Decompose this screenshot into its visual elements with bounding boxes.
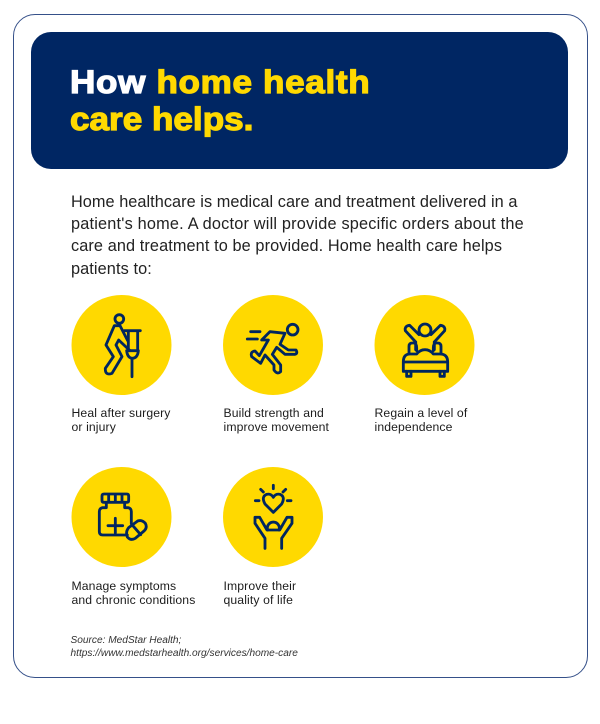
item: quality of life bbox=[223, 467, 323, 607]
intro paragraph bbox=[71, 193, 524, 278]
label bbox=[374, 406, 468, 434]
title: How home health bbox=[70, 64, 370, 100]
source note bbox=[70, 635, 298, 659]
title banner bbox=[31, 32, 568, 169]
label: or injury bbox=[72, 420, 116, 434]
label: quality of life bbox=[224, 593, 293, 607]
title bbox=[70, 64, 370, 138]
yellow circle with heart and raised arms icon bbox=[223, 467, 323, 567]
intro paragraph: patient's home. A doctor will provide specific orders about the bbox=[71, 215, 524, 233]
label bbox=[224, 406, 329, 434]
source note: https://www.medstarhealth.org/services/home-care bbox=[70, 648, 298, 659]
title: care helps. bbox=[70, 101, 253, 137]
yellow circle with bed icon bbox=[374, 295, 474, 395]
label: Build strength and bbox=[224, 406, 324, 420]
item: heal after surgery bbox=[72, 295, 172, 434]
item: regain independence bbox=[374, 295, 474, 434]
yellow circle with running icon bbox=[223, 295, 323, 395]
label: independence bbox=[374, 420, 453, 434]
label: Regain a level of bbox=[374, 406, 467, 420]
label bbox=[72, 579, 195, 607]
intro paragraph: Home healthcare is medical care and treatment delivered in a bbox=[71, 193, 517, 211]
source note: Source: MedStar Health; bbox=[70, 635, 181, 646]
label: improve movement bbox=[224, 420, 329, 434]
label bbox=[72, 406, 171, 434]
yellow circle with medicine icon bbox=[72, 467, 172, 567]
label: Heal after surgery bbox=[72, 406, 171, 420]
item: build strength bbox=[223, 295, 329, 434]
label: Manage symptoms bbox=[72, 579, 176, 593]
label: and chronic conditions bbox=[72, 593, 195, 607]
label: Improve their bbox=[224, 579, 296, 593]
intro paragraph: care and treatment to be provided. Home health care helps bbox=[71, 237, 502, 255]
item: manage symptoms bbox=[72, 467, 195, 607]
yellow circle with crutch icon bbox=[72, 295, 172, 395]
label bbox=[224, 579, 296, 607]
intro paragraph: patients to: bbox=[71, 260, 152, 278]
